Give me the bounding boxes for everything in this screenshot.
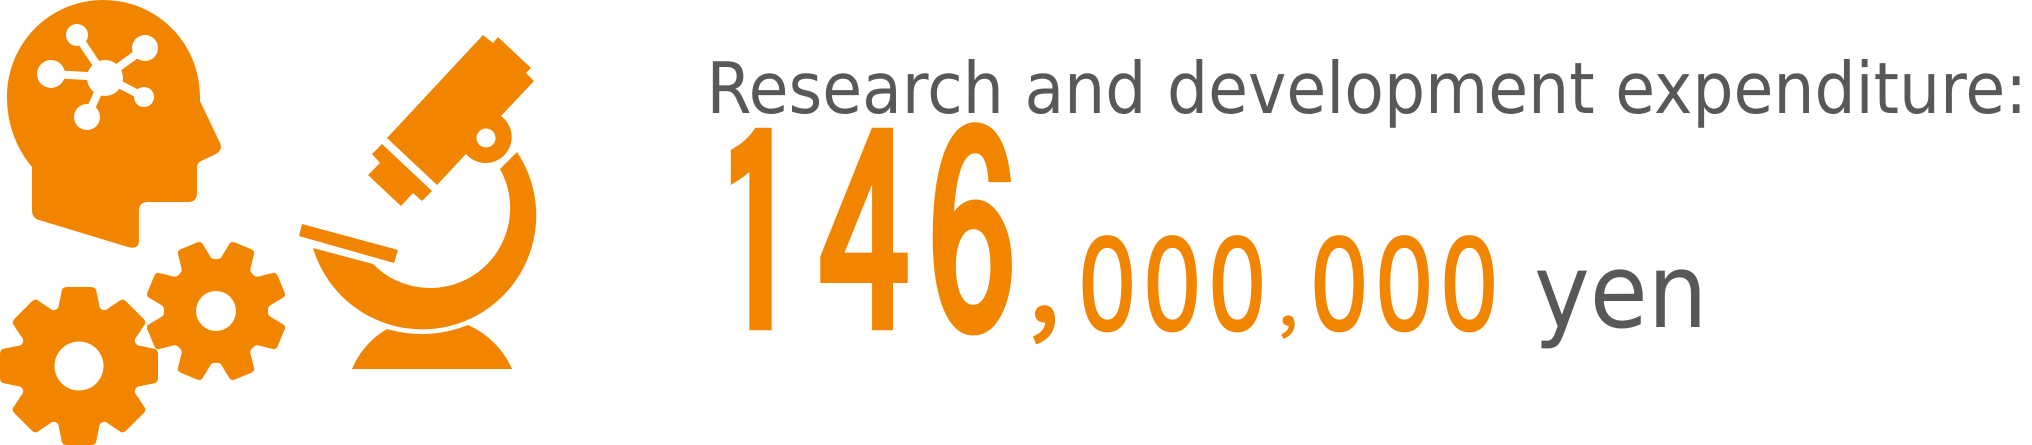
amount figure: 0 (1209, 225, 1265, 347)
icon: head with network (7, 0, 221, 248)
icon: large gear (0, 287, 158, 445)
amount figure: , (1028, 207, 1060, 352)
unit label: yen: yen (1534, 232, 1707, 352)
amount figure: 6 (928, 99, 1016, 371)
icon: microscope (299, 35, 536, 369)
amount figure: 4 (820, 99, 908, 371)
amount figure: 0 (1311, 225, 1367, 347)
amount figure: 1 (714, 99, 802, 371)
amount figure: , (1278, 257, 1298, 344)
icon: small gear (143, 238, 289, 384)
amount figure: 0 (1376, 225, 1432, 347)
amount figure: 0 (1079, 225, 1135, 347)
amount figure: 0 (1441, 225, 1497, 347)
amount figure (714, 99, 1497, 371)
heading: Research and development expenditure: (706, 47, 2027, 130)
amount figure: 0 (1144, 225, 1200, 347)
